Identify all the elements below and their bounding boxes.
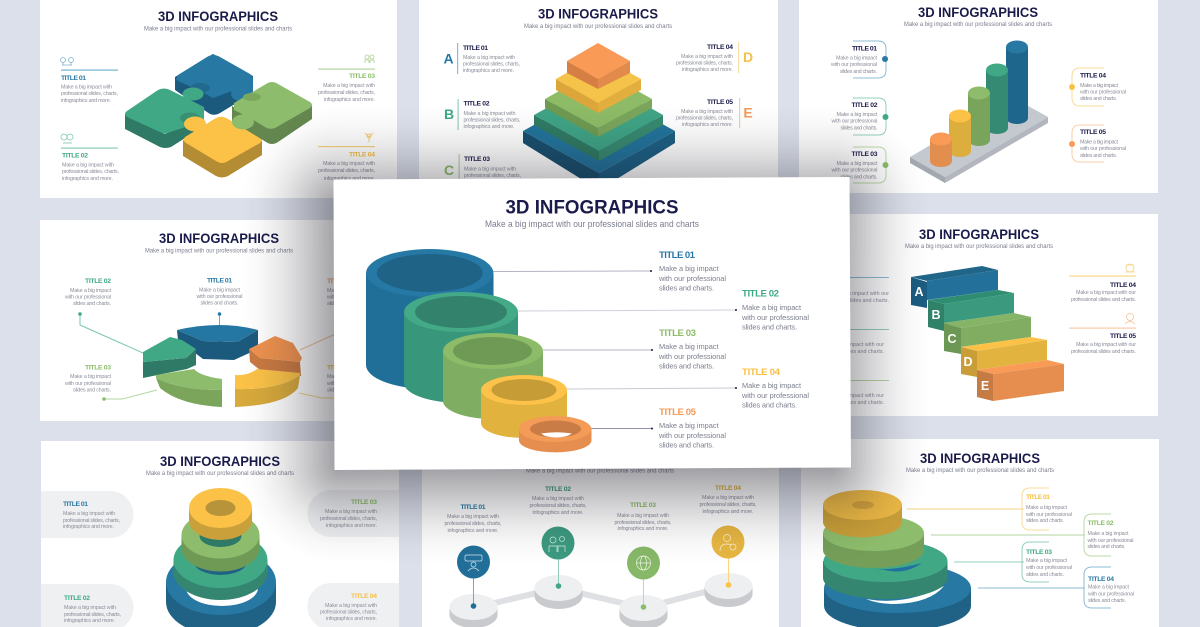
callout: B title 02: infographics and more. <box>464 124 514 130</box>
callout: title 04: Make a big impact <box>742 381 801 390</box>
callout: title 02: Make a big impact <box>742 303 801 312</box>
callout: title 04: infographics and more. <box>324 176 375 182</box>
callout: title 05: TITLE 05 <box>1110 333 1136 340</box>
clipped left callouts: professional slides and charts. <box>812 349 884 355</box>
timeline step 01: Make a big impact with <box>447 514 499 520</box>
heading: donut slide: 3D INFOGRAPHICS <box>159 231 279 246</box>
heading: rings slide <box>146 454 294 477</box>
callout: title 03: slides and charts. <box>73 388 111 394</box>
panel: donut slide <box>40 220 397 421</box>
callout: title 02: slides and charts. <box>73 301 111 307</box>
timeline step 02: infographics and more. <box>532 510 584 516</box>
callout: title 04: professional slides, charts, <box>318 168 376 174</box>
callout: D title 04: TITLE 04 <box>707 44 733 51</box>
heading: rings slide: Make a big impact with our professional slides and charts <box>146 470 294 477</box>
callout pill: title 02: TITLE 02 <box>64 595 90 602</box>
stacked rings <box>166 488 276 627</box>
callout: A title 01: professional slides, charts, <box>463 62 520 68</box>
callout: title 02: slides and charts. <box>742 322 797 332</box>
heading: pyramid slide: Make a big impact with our professional slides and charts <box>524 23 672 30</box>
timeline step 03: TITLE 03 <box>630 502 656 509</box>
callout: E title 05: E <box>743 104 753 120</box>
callout: title 02: professional slides, charts, <box>62 169 120 175</box>
callout: title 03 <box>1022 542 1072 582</box>
timeline step 03: infographics and more. <box>618 526 668 532</box>
callout: A title 01: TITLE 01 <box>463 45 488 52</box>
panel: pyramid slide <box>419 0 778 200</box>
timeline step 03: Make a big impact with <box>617 513 669 519</box>
timeline step 02: TITLE 02 <box>545 486 571 493</box>
callout: title 02: with our professional <box>830 118 878 124</box>
callout pill: title 04 <box>308 583 399 627</box>
staircase blocks A to E: C <box>947 332 957 346</box>
heading: pyramid slide <box>524 6 672 30</box>
callout: title 03: TITLE 03 <box>659 328 696 339</box>
callout: title 02: with our professional <box>64 294 111 300</box>
callout: title 05: Make a big impact with our <box>1076 342 1136 348</box>
heading: puzzle slide: 3D INFOGRAPHICS <box>158 9 278 24</box>
callout: title 01: TITLE 01 <box>659 250 696 261</box>
timeline step 02: professional slides, charts, <box>530 503 587 509</box>
callout pill: title 01: infographics and more. <box>63 524 114 530</box>
clipped left callouts: Make a big impact with our <box>824 291 889 297</box>
callout: title 01 <box>196 278 242 306</box>
leader lines <box>907 509 1085 588</box>
callout: title 03: TITLE 03 <box>852 151 878 158</box>
callout: title 02: Make a big impact <box>1088 531 1129 537</box>
heading: puzzle slide <box>144 9 292 32</box>
heading: cylinder bars slide: Make a big impact with our professional slides and charts <box>904 21 1052 28</box>
panel: steps slide <box>800 214 1158 416</box>
panel: rings slide <box>41 441 399 627</box>
callout: title 02 <box>64 278 112 307</box>
callout: D title 04: professional slides, charts, <box>676 60 734 66</box>
callout: title 05: professional slides and charts. <box>1071 349 1136 355</box>
callout: B title 02: TITLE 02 <box>464 100 490 108</box>
callout: clipped titles on right: with our professional <box>326 294 373 300</box>
callout: title 01: slides and charts. <box>200 300 238 306</box>
timeline step 01 <box>444 504 502 627</box>
clipped left callouts: professional slides and charts. <box>812 400 884 406</box>
callout pill: title 01: Make a big impact with <box>63 511 115 517</box>
callout: D title 04: infographics and more. <box>682 67 733 73</box>
heading: cylinder bars slide <box>904 5 1052 28</box>
callout: title 04: with our professional <box>1087 592 1134 598</box>
staircase blocks A to E: D <box>963 355 973 369</box>
callout: E title 05: infographics and more. <box>682 122 733 128</box>
panel: timeline slide <box>422 440 779 627</box>
callout: title 02: TITLE 02 <box>85 278 111 285</box>
callout: title 03: with our professional <box>658 352 726 361</box>
callout: E title 05: professional slides, charts, <box>676 116 734 122</box>
callout: title 01: Make a big impact <box>659 264 718 273</box>
callout: title 03 <box>64 364 112 394</box>
callout: title 05: TITLE 05 <box>1080 129 1106 136</box>
callout pill: title 04: TITLE 04 <box>351 593 377 600</box>
callout: title 01 <box>60 58 118 104</box>
timeline step 02 <box>530 486 587 609</box>
callout: B title 02: B <box>444 106 454 122</box>
callout: title 01: with our professional <box>658 274 726 283</box>
callout: title 01: slides and charts. <box>659 284 714 292</box>
callout: title 01: professional slides, charts, <box>61 91 118 97</box>
staircase blocks A to E: A <box>914 285 924 299</box>
callout: title 03: professional slides, charts, <box>318 90 376 96</box>
staircase blocks A to E: E <box>981 379 989 393</box>
callout pill: title 03: professional slides, charts, <box>320 516 378 522</box>
heading: stacked discs slide: 3D INFOGRAPHICS <box>920 451 1040 466</box>
callout pill: title 01: TITLE 01 <box>63 501 88 508</box>
clipped left callouts: Make a big impact with our <box>819 342 884 348</box>
callout: title 02: TITLE 02 <box>742 288 779 300</box>
callout: C title 03: TITLE 03 <box>464 156 490 163</box>
callout: title 01: Make a big impact <box>1026 505 1068 511</box>
callout: title 04: professional slides and charts. <box>1071 297 1136 303</box>
callout: title 01: Make a big impact <box>836 56 878 62</box>
heading: rings slide: 3D INFOGRAPHICS <box>160 454 280 469</box>
callout: title 01: infographics and more. <box>61 98 111 104</box>
panel: cylinder bars slide <box>799 0 1158 193</box>
heading: donut slide <box>145 231 293 254</box>
callout: title 03: with our professional <box>830 168 878 174</box>
callout: title 04: TITLE 04 <box>1110 282 1136 289</box>
callout: title 02 <box>1084 514 1134 556</box>
callout: title 04: Make a big impact <box>1080 83 1118 89</box>
callout: clipped titles on right <box>326 278 373 394</box>
callout: title 01: slides and charts. <box>1026 518 1064 524</box>
callout: title 04: slides and charts. <box>1088 598 1126 604</box>
callout: E title 05: TITLE 05 <box>707 99 733 106</box>
callout: title 02: TITLE 02 <box>1088 520 1114 527</box>
callout: C title 03: C <box>444 162 454 178</box>
callout: title 03: TITLE 03 <box>85 364 111 372</box>
callout: title 02 <box>61 134 120 182</box>
callout pill: title 04: Make a big impact with <box>325 603 377 609</box>
callout: title 03 <box>658 328 726 370</box>
staircase blocks A to E: B <box>931 308 941 322</box>
callout: B title 02 <box>444 99 521 130</box>
heading: steps slide <box>905 227 1053 250</box>
drop shadow of centre slide <box>240 105 930 565</box>
callout: C title 03: Make a big impact with <box>464 166 516 172</box>
callout: title 04: slides and charts. <box>1080 96 1117 102</box>
callout: title 05: slides and charts. <box>659 440 714 450</box>
callout: D title 04 <box>676 42 753 73</box>
callout: title 04 <box>1084 567 1134 608</box>
callout: title 05: with our professional <box>1079 146 1126 152</box>
callout: title 05: TITLE 05 <box>659 407 697 418</box>
callout: title 03: Make a big impact <box>659 342 718 351</box>
callout: title 01: with our professional <box>1025 512 1072 518</box>
callout: title 01 <box>830 41 888 78</box>
callout: title 02: Make a big impact <box>836 112 878 118</box>
stacked pyramid <box>523 43 675 190</box>
connectors between discs <box>473 586 728 608</box>
callout: D title 04: Make a big impact with <box>681 54 733 60</box>
callout: title 03: TITLE 03 <box>1026 549 1052 556</box>
callout: A title 01 <box>443 43 520 74</box>
callout: title 02: slides and charts. <box>1088 544 1126 550</box>
callout pill: title 03 <box>308 490 399 537</box>
callout: title 02: infographics and more. <box>62 176 113 182</box>
callout: title 03: with our professional <box>64 381 111 387</box>
timeline step 04: Make a big impact with <box>702 495 754 501</box>
leader lines <box>493 270 737 430</box>
panel: stacked discs slide <box>801 439 1159 627</box>
callout: C title 03 <box>444 154 522 180</box>
callout: title 01: TITLE 01 <box>1026 494 1050 501</box>
callout: clipped titles on right: TITLE 05 <box>327 278 353 285</box>
heading: puzzle slide: Make a big impact with our professional slides and charts <box>144 26 292 32</box>
callout: title 04: Make a big impact <box>1088 584 1130 590</box>
callout: clipped titles on right: Make a big impact <box>327 288 368 294</box>
puzzle diagram <box>125 54 312 178</box>
callout: title 05 <box>658 407 726 450</box>
callout: title 04: TITLE 04 <box>1080 72 1106 80</box>
callout: title 03: Make a big impact <box>836 161 878 167</box>
callout: title 04 <box>1069 68 1126 106</box>
callout: title 02 <box>830 98 888 135</box>
heading: pyramid slide: 3D INFOGRAPHICS <box>538 6 658 22</box>
heading: centre slide: 3D INFOGRAPHICS <box>506 196 678 218</box>
staircase blocks A to E <box>911 266 1064 401</box>
callout: A title 01: Make a big impact with <box>463 55 515 61</box>
callout: title 01: Make a big impact with <box>61 84 112 90</box>
callout pill: title 04: professional slides, charts, <box>320 610 378 616</box>
heading: stacked discs slide: Make a big impact with our professional slides and charts <box>906 467 1054 474</box>
callout: title 04 <box>741 367 809 410</box>
callout pill: title 02 <box>41 584 134 627</box>
timeline step 01: TITLE 01 <box>460 504 486 511</box>
callout: title 01: with our professional <box>196 294 242 300</box>
callout: title 03: Make a big impact <box>70 374 112 380</box>
callout: title 02: with our professional <box>741 313 809 322</box>
callout: title 04: TITLE 04 <box>349 152 375 158</box>
heading: stacked discs slide <box>906 451 1054 474</box>
callout: title 04: TITLE 04 <box>742 367 781 378</box>
callout: title 01 <box>1022 488 1072 530</box>
callout: title 04: with our professional <box>1079 90 1126 96</box>
callout: title 02: TITLE 02 <box>852 102 878 109</box>
isometric bar chart <box>910 40 1048 183</box>
callout: D title 04: D <box>743 49 753 65</box>
offset stacked discs <box>823 490 971 627</box>
callout: title 05 <box>1069 314 1136 355</box>
timeline step 04 <box>700 485 757 607</box>
callout: title 03: infographics and more. <box>324 97 375 103</box>
timeline step 04: infographics and more. <box>702 509 754 515</box>
3D segmented donut with leader lines <box>78 312 340 407</box>
callout: title 03 <box>830 147 888 183</box>
callout pill: title 03: TITLE 03 <box>351 499 377 506</box>
heading: steps slide: Make a big impact with our professional slides and charts <box>905 243 1053 250</box>
callout pill: title 02: Make a big impact with <box>64 605 116 611</box>
heading: centre slide: Make a big impact with our professional slides and charts <box>485 219 699 229</box>
callout pill: title 03: Make a big impact with <box>325 509 377 515</box>
callout: title 01: Make a big impact <box>199 288 240 294</box>
callout: clipped titles on right: slides and charts. <box>327 301 365 307</box>
callout: title 03: Make a big impact with <box>323 83 375 89</box>
callout: B title 02: Make a big impact with <box>464 111 516 117</box>
heading: cylinder bars slide: 3D INFOGRAPHICS <box>918 5 1038 20</box>
callout: title 05: Make a big impact <box>1080 140 1118 146</box>
heading: donut slide: Make a big impact with our professional slides and charts <box>145 248 293 254</box>
callout: title 01 <box>658 250 726 292</box>
heading: steps slide: 3D INFOGRAPHICS <box>919 227 1039 242</box>
callout: title 04: Make a big impact with <box>323 161 375 167</box>
callout: B title 02: professional slides, charts, <box>464 118 521 124</box>
callout: title 05: slides and charts. <box>1080 153 1117 159</box>
callout: clipped titles on right: slides and charts. <box>327 388 365 394</box>
callout: title 03: slides and charts. <box>659 362 714 370</box>
callout: title 02: Make a big impact with <box>62 162 114 168</box>
callout: clipped titles on right: with our professional <box>326 381 373 387</box>
callout: title 03: slides and charts. <box>840 174 878 180</box>
timeline step 01: professional slides, charts, <box>444 521 502 527</box>
callout: title 02: Make a big impact <box>70 288 112 294</box>
callout: title 01: slides and charts. <box>840 69 877 75</box>
callout: A title 01: A <box>443 50 454 66</box>
clipped left callouts <box>812 277 889 406</box>
callout: title 03: TITLE 03 <box>349 73 375 80</box>
callout pill: title 02: professional slides, charts, <box>64 612 122 618</box>
callout: title 01: TITLE 01 <box>852 46 877 52</box>
callout: title 05: with our professional <box>658 431 726 440</box>
timeline step 03 <box>614 502 672 627</box>
callout: title 02: TITLE 02 <box>62 152 88 160</box>
callout: title 04: Make a big impact with our <box>1076 290 1136 296</box>
callout pill: title 04: infographics and more. <box>326 616 377 622</box>
subheading: timeline slide: Make a big impact with our professional slides and charts <box>526 468 674 474</box>
heading: centre slide <box>485 196 699 229</box>
callout: title 01: TITLE 01 <box>207 278 232 284</box>
callout: title 04: TITLE 04 <box>1088 576 1114 583</box>
clipped left callouts: Make a big impact with our <box>819 393 884 399</box>
timeline step 04: professional slides, charts, <box>700 502 757 508</box>
callout pill: title 03: infographics and more. <box>326 523 377 529</box>
callout: title 04: slides and charts. <box>742 400 797 410</box>
callout pill: title 01 <box>41 491 134 538</box>
callout: title 03: slides and charts. <box>1026 572 1064 578</box>
timeline step 04: TITLE 04 <box>715 485 741 492</box>
callout: title 04 <box>1069 264 1136 303</box>
callout: clipped titles on right: TITLE 04 <box>327 364 353 372</box>
callout: title 03: with our professional <box>1025 565 1072 571</box>
clipped left callouts: professional slides and charts. <box>817 298 889 304</box>
callout: title 01: with our professional <box>830 62 877 68</box>
callout: title 01: TITLE 01 <box>61 75 86 82</box>
callout pill: title 01: professional slides, charts, <box>63 518 120 524</box>
callout: title 02 <box>741 288 809 332</box>
timeline step 02: Make a big impact with <box>532 496 584 502</box>
timeline step 03: professional slides, charts, <box>614 520 672 526</box>
callout: clipped titles on right: Make a big impact <box>327 374 368 380</box>
callout: title 02: with our professional <box>1086 538 1134 544</box>
callout: E title 05: Make a big impact with <box>681 109 733 115</box>
callout: title 05 <box>1069 125 1126 162</box>
callout: C title 03: professional slides, charts, <box>464 173 522 179</box>
callout: title 05: Make a big impact <box>659 421 718 430</box>
callout: title 04: with our professional <box>741 391 809 400</box>
callout pill: title 02: infographics and more. <box>64 618 115 624</box>
callout: title 04 <box>318 133 376 182</box>
callout: title 03 <box>318 55 376 103</box>
callout: A title 01: infographics and more. <box>463 68 514 74</box>
timeline step 01: infographics and more. <box>448 528 498 534</box>
callout: title 03: Make a big impact <box>1026 558 1068 564</box>
panel: puzzle slide <box>40 0 397 198</box>
callout: E title 05 <box>676 98 753 128</box>
callout: title 02: slides and charts. <box>840 126 878 132</box>
stacked 3D cylinders <box>366 249 592 452</box>
